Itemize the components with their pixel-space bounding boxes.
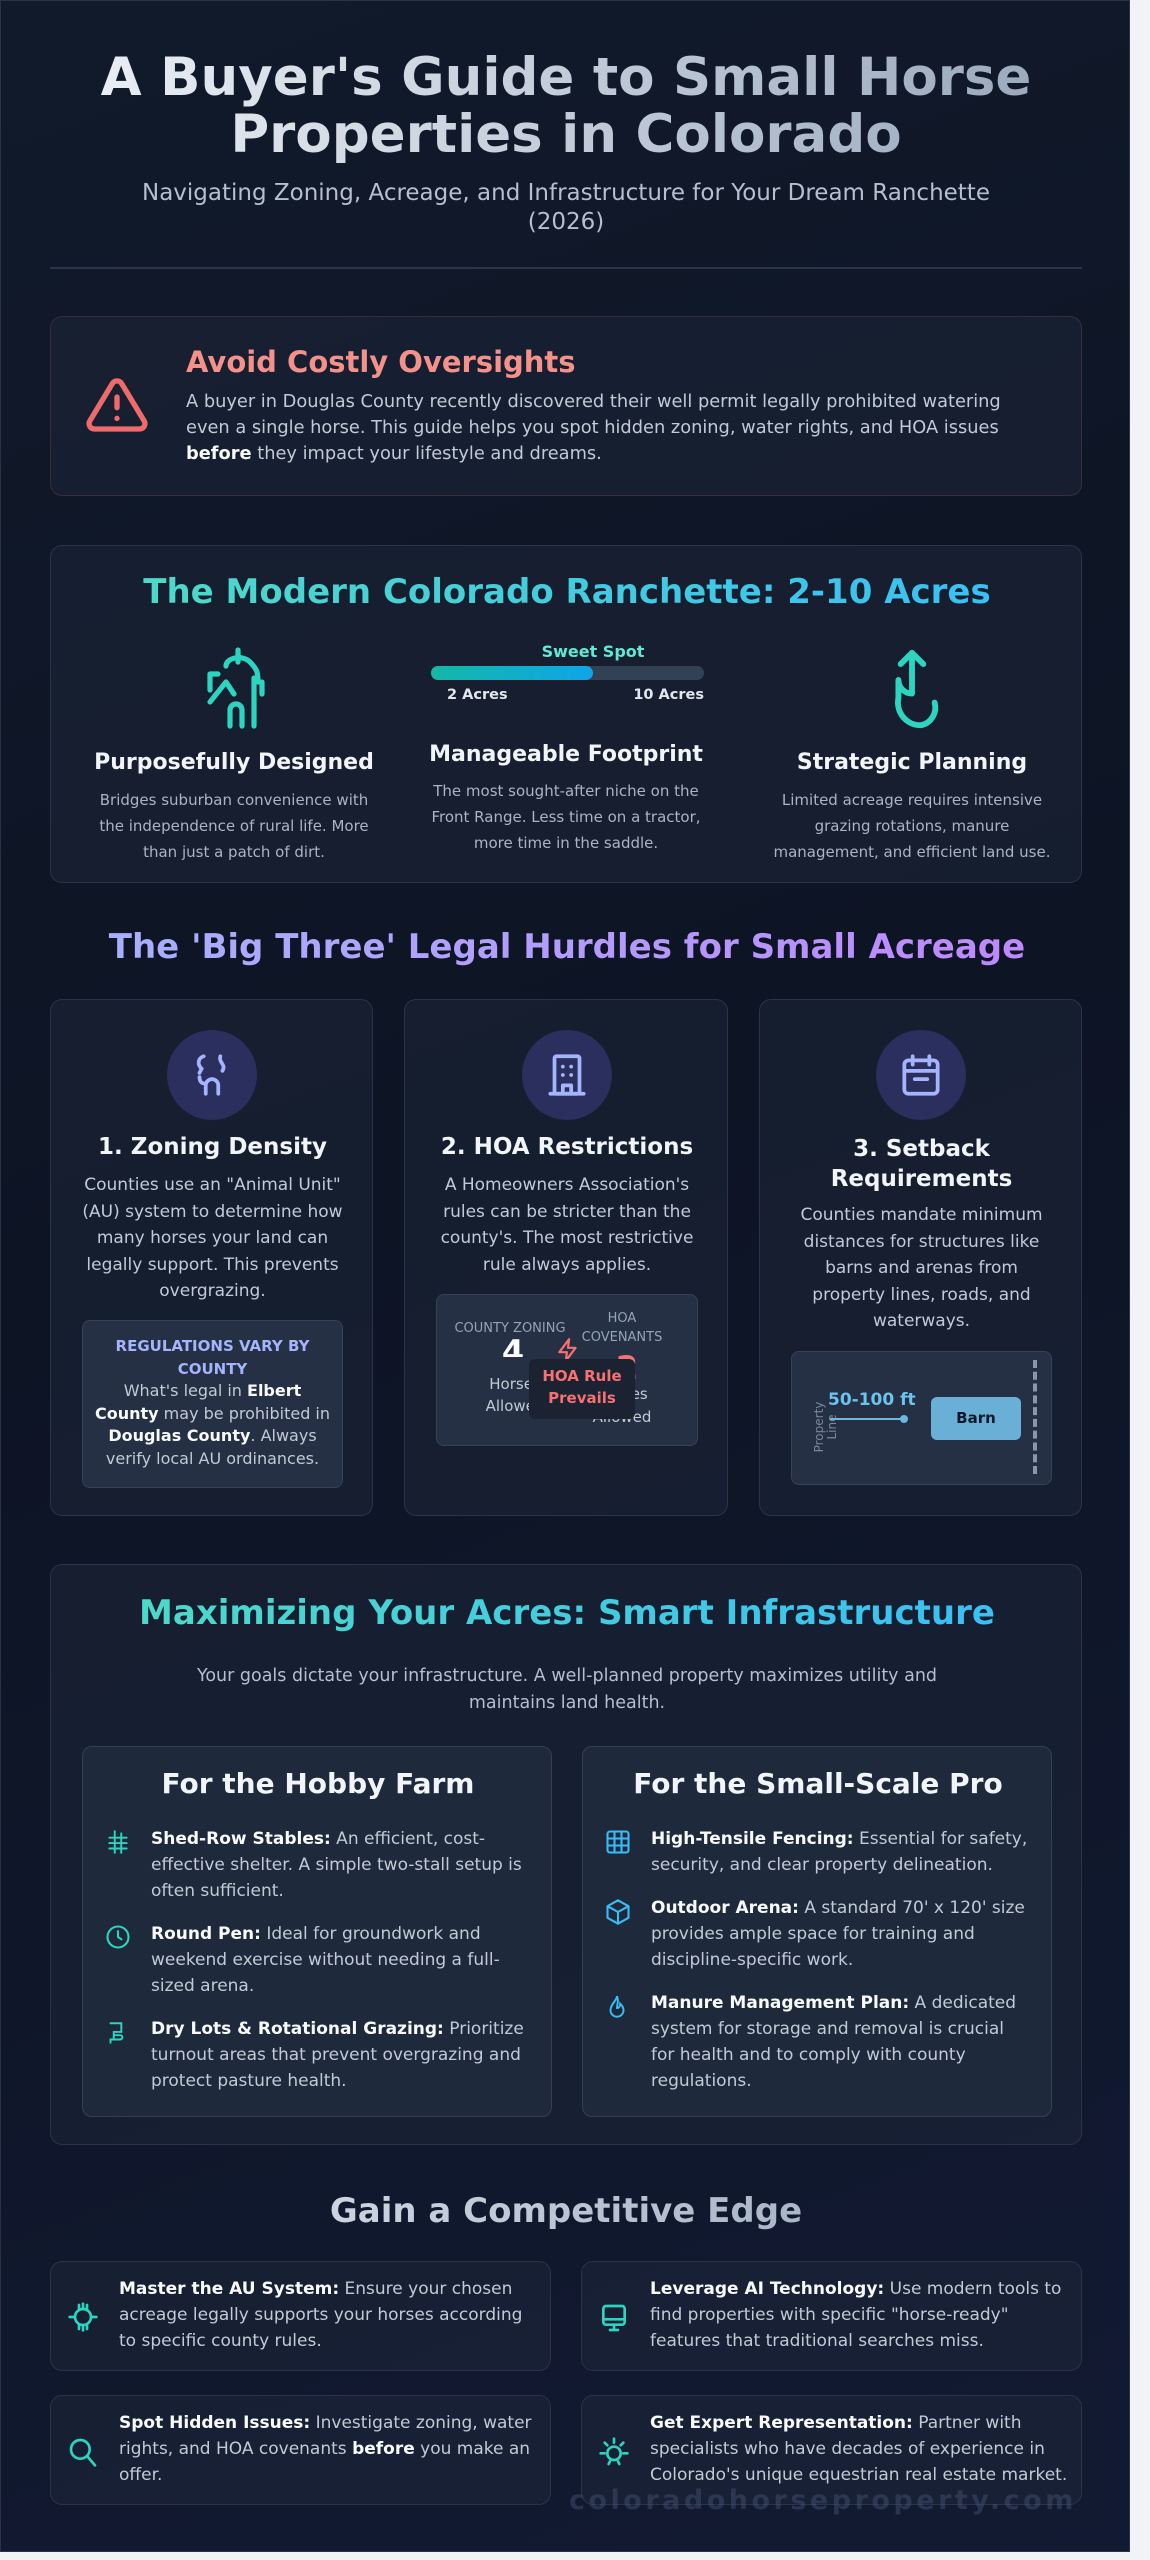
title: For the Hobby Farm (162, 1767, 474, 1800)
icon: lightning (558, 1338, 577, 1359)
title: Manageable Footprint (429, 742, 703, 767)
callout: regulations vary: REGULATIONS VARY BY COUNTY (116, 1337, 309, 1378)
icon: chip (68, 2302, 98, 2332)
intro: Your goals dictate your infrastructure. A well-planned property maximizes utility and maintains land health. (197, 1666, 937, 1713)
title: Strategic Planning (797, 750, 1027, 775)
description: Counties use an "Animal Unit" (AU) system to determine how many horses your land can legally support. This prevents overgrazing. (82, 1175, 343, 1301)
card: leverage ai technology (581, 2261, 1082, 2371)
panel: modern ranchette (50, 545, 1082, 883)
icon: pointer (895, 650, 938, 728)
panel: hoa restrictions (404, 999, 728, 1516)
title (831, 1136, 1012, 1192)
heading: Avoid Costly Oversights (186, 345, 576, 379)
icon: horse circle (167, 1030, 257, 1120)
diagram: setback: 50-100 ft (828, 1390, 916, 1410)
card: spot hidden issues: Spot Hidden Issues: Investigate zoning, water rights, and HOA covenants before you make an offer. (119, 2413, 532, 2485)
bar: acreage range (431, 666, 704, 680)
heading: competitive edge (1, 2191, 1131, 2231)
diagram: setback: Property Line (812, 1402, 839, 1452)
diagram: county vs hoa: 2 (616, 1349, 638, 1387)
subpanel: hobby farm (82, 1746, 552, 2117)
icon: bulb (599, 2437, 629, 2466)
callout: regulations vary: What's legal in Elbert County may be prohibited in Douglas County. Always verify local AU ordinances. (95, 1381, 330, 1468)
barn: Barn (956, 1409, 996, 1427)
heading: The Modern Colorado Ranchette: 2-10 Acres (143, 572, 991, 612)
diagram: county vs hoa: Horses Allowed (486, 1375, 544, 1415)
diagram: county vs hoa: COUNTY ZONING (454, 1321, 566, 1336)
column: manageable footprint: 2 Acres (447, 687, 508, 703)
card: master the au system: Master the AU System: Ensure your chosen acreage legally supports your horses according to specific county rules. (119, 2279, 522, 2351)
diagram: setback (791, 1351, 1052, 1485)
label: sweet spot: Sweet Spot (542, 642, 644, 661)
title: Purposefully Designed (94, 750, 374, 775)
callout: regulations vary (82, 1320, 343, 1488)
diagram: county vs hoa: Horses Allowed (593, 1385, 651, 1426)
item: round pen: Round Pen: Ideal for groundwork and weekend exercise without needing a full-sized arena. (151, 1924, 500, 1996)
heading: competitive edge: Gain a Competitive Edge (330, 2191, 802, 2231)
body text: A buyer in Douglas County recently discovered their well permit legally prohibited watering even a single horse. This guide helps you spot hidden zoning, water rights, and HOA issues before they impact your lifestyle and dreams. (186, 391, 1001, 464)
list: hobby items (106, 1829, 524, 2091)
title: 1. Zoning Density (98, 1134, 327, 1160)
subtitle: Navigating Zoning, Acreage, and Infrastructure for Your Dream Ranchette (2026) (142, 180, 990, 235)
description: Limited acreage requires intensive grazing rotations, manure management, and efficient land use. (773, 791, 1050, 861)
icon: warning triangle (86, 378, 148, 432)
description: Counties mandate minimum distances for structures like barns and arenas from property lines, roads, and waterways. (800, 1205, 1043, 1331)
column: manageable footprint: 10 Acres (633, 687, 704, 703)
diagram: county vs hoa: HOA COVENANTS (582, 1311, 662, 1345)
barn (931, 1397, 1021, 1440)
panel: zoning density (50, 999, 373, 1516)
callout: hoa rule prevails: HOA Rule Prevails (542, 1367, 622, 1407)
title: 2. HOA Restrictions (441, 1134, 693, 1160)
item: outdoor arena: Outdoor Arena: A standard 70' x 120' size provides ample space for training and discipline-specific work. (651, 1898, 1025, 1970)
card: master the au system (50, 2261, 551, 2371)
panel: smart infrastructure (50, 1564, 1082, 2145)
heading: big three: The 'Big Three' Legal Hurdles for Small Acreage (109, 927, 1025, 967)
heading: Maximizing Your Acres: Smart Infrastructure (139, 1593, 995, 1633)
description: A Homeowners Association's rules can be stricter than the county's. The most restrictive rule always applies. (441, 1175, 693, 1274)
title: For the Small-Scale Pro (633, 1767, 1003, 1800)
list: pro items (606, 1829, 1027, 2091)
card: expert representation (581, 2395, 1082, 2505)
item: shed-row stables: Shed-Row Stables: An efficient, cost-effective shelter. A simple two-stall setup is often sufficient. (151, 1829, 522, 1901)
card: leverage ai technology: Leverage AI Technology: Use modern tools to find properties with specific "horse-ready" features that traditional searches miss. (650, 2279, 1061, 2351)
title: 3. Setback (853, 1136, 990, 1162)
title: Properties in Colorado (230, 104, 902, 165)
icon: horse (207, 647, 265, 729)
panel: avoid costly oversights (50, 316, 1082, 496)
item: high-tensile fencing: High-Tensile Fencing: Essential for safety, security, and clear property delineation. (651, 1829, 1027, 1875)
icon: calendar circle (876, 1030, 966, 1120)
description: The most sought-after niche on the Front Range. Less time on a tractor, more time in the saddle. (431, 782, 701, 852)
icon: monitor (602, 2304, 626, 2332)
card: expert representation: Get Expert Representation: Partner with specialists who have decades of experience in Colorado's unique equestrian real estate market. (650, 2413, 1067, 2485)
item: manure management: Manure Management Plan: A dedicated system for storage and removal is crucial for health and to comply with county regulations. (651, 1993, 1016, 2091)
column: strategic planning (773, 650, 1050, 861)
title (1, 49, 1131, 163)
icon: building circle (522, 1030, 612, 1120)
callout: hoa rule prevails (529, 1359, 635, 1419)
watermark: coloradohorseproperty.com (569, 2485, 1077, 2516)
column: purposefully designed (94, 647, 374, 861)
description: Bridges suburban convenience with the independence of rural life. More than just a patch of dirt. (99, 791, 369, 861)
panel: setback requirements (759, 999, 1082, 1516)
column: manageable footprint (429, 642, 704, 852)
card: spot hidden issues (50, 2395, 551, 2505)
title: Requirements (831, 1166, 1012, 1192)
title: A Buyer's Guide to Small Horse (101, 47, 1031, 108)
icon: magnifier (70, 2438, 96, 2467)
item: dry lots: Dry Lots & Rotational Grazing: Prioritize turnout areas that prevent overgrazing and protect pasture health. (151, 2019, 524, 2091)
subpanel: small-scale pro (582, 1746, 1052, 2117)
diagram: county vs hoa (436, 1294, 698, 1446)
